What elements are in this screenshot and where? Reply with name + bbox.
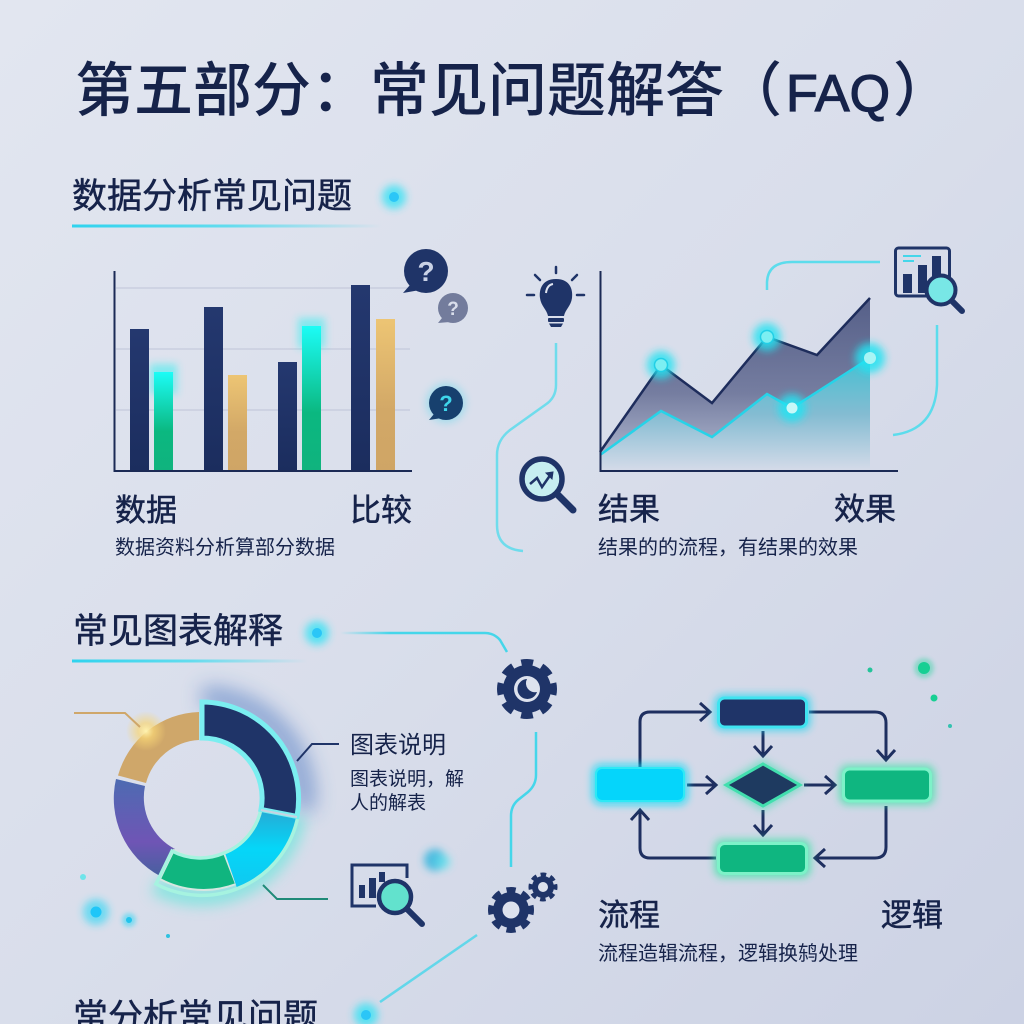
connector: top right (767, 262, 880, 290)
donut segment: cyan (225, 809, 297, 888)
donut legend text: 人的解表 (350, 792, 426, 814)
glow blob (424, 849, 451, 871)
icon: question bubble teal: ? (439, 391, 453, 416)
icon: question bubble large: ? (417, 256, 435, 287)
connector: right side (893, 325, 937, 435)
green particles (868, 658, 952, 728)
chart point: cyan end (855, 343, 885, 373)
donut rim (156, 809, 298, 895)
donut legend text (350, 732, 464, 814)
glare (126, 711, 166, 751)
flow node: right green (839, 765, 935, 805)
donut segment: purple (114, 779, 175, 876)
flow chart labels (598, 898, 943, 965)
flow chart labels: 流程 (598, 898, 660, 933)
title: 第五部分： (75, 58, 370, 124)
flow node: top navy (714, 694, 811, 731)
icon: light bulb (527, 267, 584, 327)
section heading: data analysis FAQ (72, 177, 406, 228)
title: ） (893, 58, 952, 124)
chart point: peak 1 (647, 351, 675, 379)
line chart labels: 效果 (834, 492, 896, 527)
flow arrows (631, 703, 895, 867)
icon: question bubble teal (426, 383, 466, 423)
flow chart labels: 逻辑 (881, 898, 943, 933)
donut segment: green (160, 850, 236, 890)
flow node: decision diamond (720, 759, 806, 811)
donut legend text: 图表说明 (350, 732, 446, 759)
title: FAQ (786, 65, 890, 123)
line chart labels (598, 492, 896, 559)
icon: chart magnifier (352, 865, 422, 924)
icon: report with magnifier top right (896, 248, 962, 311)
flow node: bottom green (714, 839, 811, 878)
bar chart labels (115, 493, 412, 559)
flow chart (592, 694, 935, 878)
icon: magnifier with trend (522, 459, 573, 510)
section heading: common chart explanations (72, 612, 329, 662)
particles (80, 874, 170, 938)
title: （ (723, 58, 782, 124)
title: 常见问题解答 (370, 58, 724, 124)
connector: gears to bottom dot (380, 935, 477, 1002)
flow node: left cyan (592, 764, 688, 805)
bar chart labels: 数据资料分析算部分数据 (115, 536, 335, 559)
flow chart labels: 流程造辑流程，逻辑换鸫处理 (598, 942, 858, 965)
icon: question bubble grey (438, 293, 468, 323)
icon: question bubble grey: ? (447, 299, 459, 320)
icon: gear with moon (496, 658, 558, 720)
donut segment: orange (118, 712, 199, 783)
connector: gear to gears (511, 732, 536, 867)
area line chart (600, 271, 898, 471)
donut chart (114, 697, 305, 897)
bar chart labels: 比较 (350, 493, 412, 528)
bar chart (114, 271, 412, 471)
bar chart labels: 数据 (115, 493, 177, 528)
icon: question bubble large (403, 249, 448, 293)
connector: heading to gear (340, 633, 507, 652)
line chart labels: 结果的的流程，有结果的效果 (598, 536, 858, 559)
donut segment: navy (202, 702, 299, 816)
leader lines (74, 713, 339, 899)
chart point: peak 2 (753, 323, 781, 351)
section heading: common chart explanations: 常见图表解释 (73, 612, 283, 651)
connector: bulb to magnifier (497, 343, 556, 551)
chart point: cyan low (778, 394, 806, 422)
section heading: data analysis FAQ: 数据分析常见问题 (72, 177, 352, 216)
donut legend text: 图表说明，解 (350, 768, 464, 790)
icon: two gears (487, 872, 558, 934)
line chart labels: 结果 (598, 492, 660, 527)
